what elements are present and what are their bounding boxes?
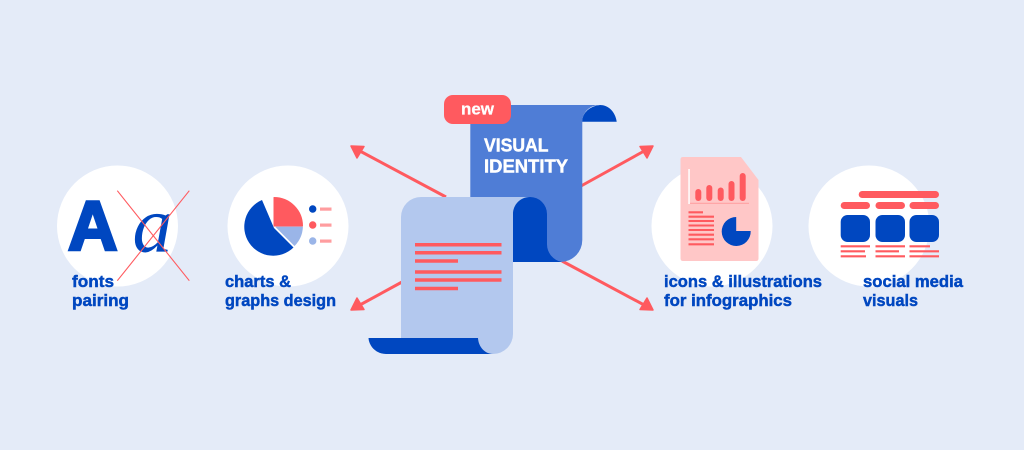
text lines [415, 245, 502, 288]
badge: new [444, 95, 511, 124]
arrow: lower left [351, 282, 402, 310]
icon: report document [680, 157, 758, 261]
scroll curl top [582, 105, 617, 122]
label: fonts pairing: pairing [72, 291, 129, 310]
icon: pie chart [244, 198, 302, 256]
back scroll: visual identity [444, 95, 617, 262]
label: icons and illustrations for infographics: for infographics [664, 291, 792, 310]
bottom curl [368, 338, 493, 354]
circle: icons [652, 166, 772, 286]
arrow: upper right [581, 146, 653, 186]
arrow: lower right [562, 261, 653, 310]
icon: chart legend [309, 205, 332, 245]
scroll body [470, 105, 600, 262]
title: visual identity: VISUAL [484, 135, 548, 156]
circle: social [808, 166, 930, 286]
panel: social media visuals [808, 166, 964, 310]
circle: charts [228, 166, 348, 286]
label: charts and graphs design: graphs design [225, 291, 336, 310]
icon: social media layout [841, 191, 939, 256]
panel: icons and illustrations [652, 157, 822, 310]
arrows [351, 146, 653, 310]
icon: italic letter a: a [132, 182, 172, 270]
title: visual identity: IDENTITY [484, 155, 569, 176]
icon: red cross [117, 191, 189, 281]
scroll body [401, 197, 530, 354]
panel: fonts pairing [57, 166, 189, 310]
circle: fonts [57, 166, 178, 286]
badge: new: new [461, 100, 495, 118]
label: icons and illustrations for infographics: icons & illustrations [664, 272, 822, 291]
label: social media visuals: social media [863, 272, 964, 291]
icon: bold letter A: A [68, 187, 118, 265]
panel: charts and graphs [225, 166, 348, 310]
front scroll: document [368, 197, 562, 354]
label: fonts pairing: fonts [72, 272, 114, 291]
label: social media visuals: visuals [863, 291, 918, 310]
label: charts and graphs design: charts & [225, 272, 291, 291]
inner fold [505, 197, 562, 262]
arrow: upper left [351, 146, 446, 197]
